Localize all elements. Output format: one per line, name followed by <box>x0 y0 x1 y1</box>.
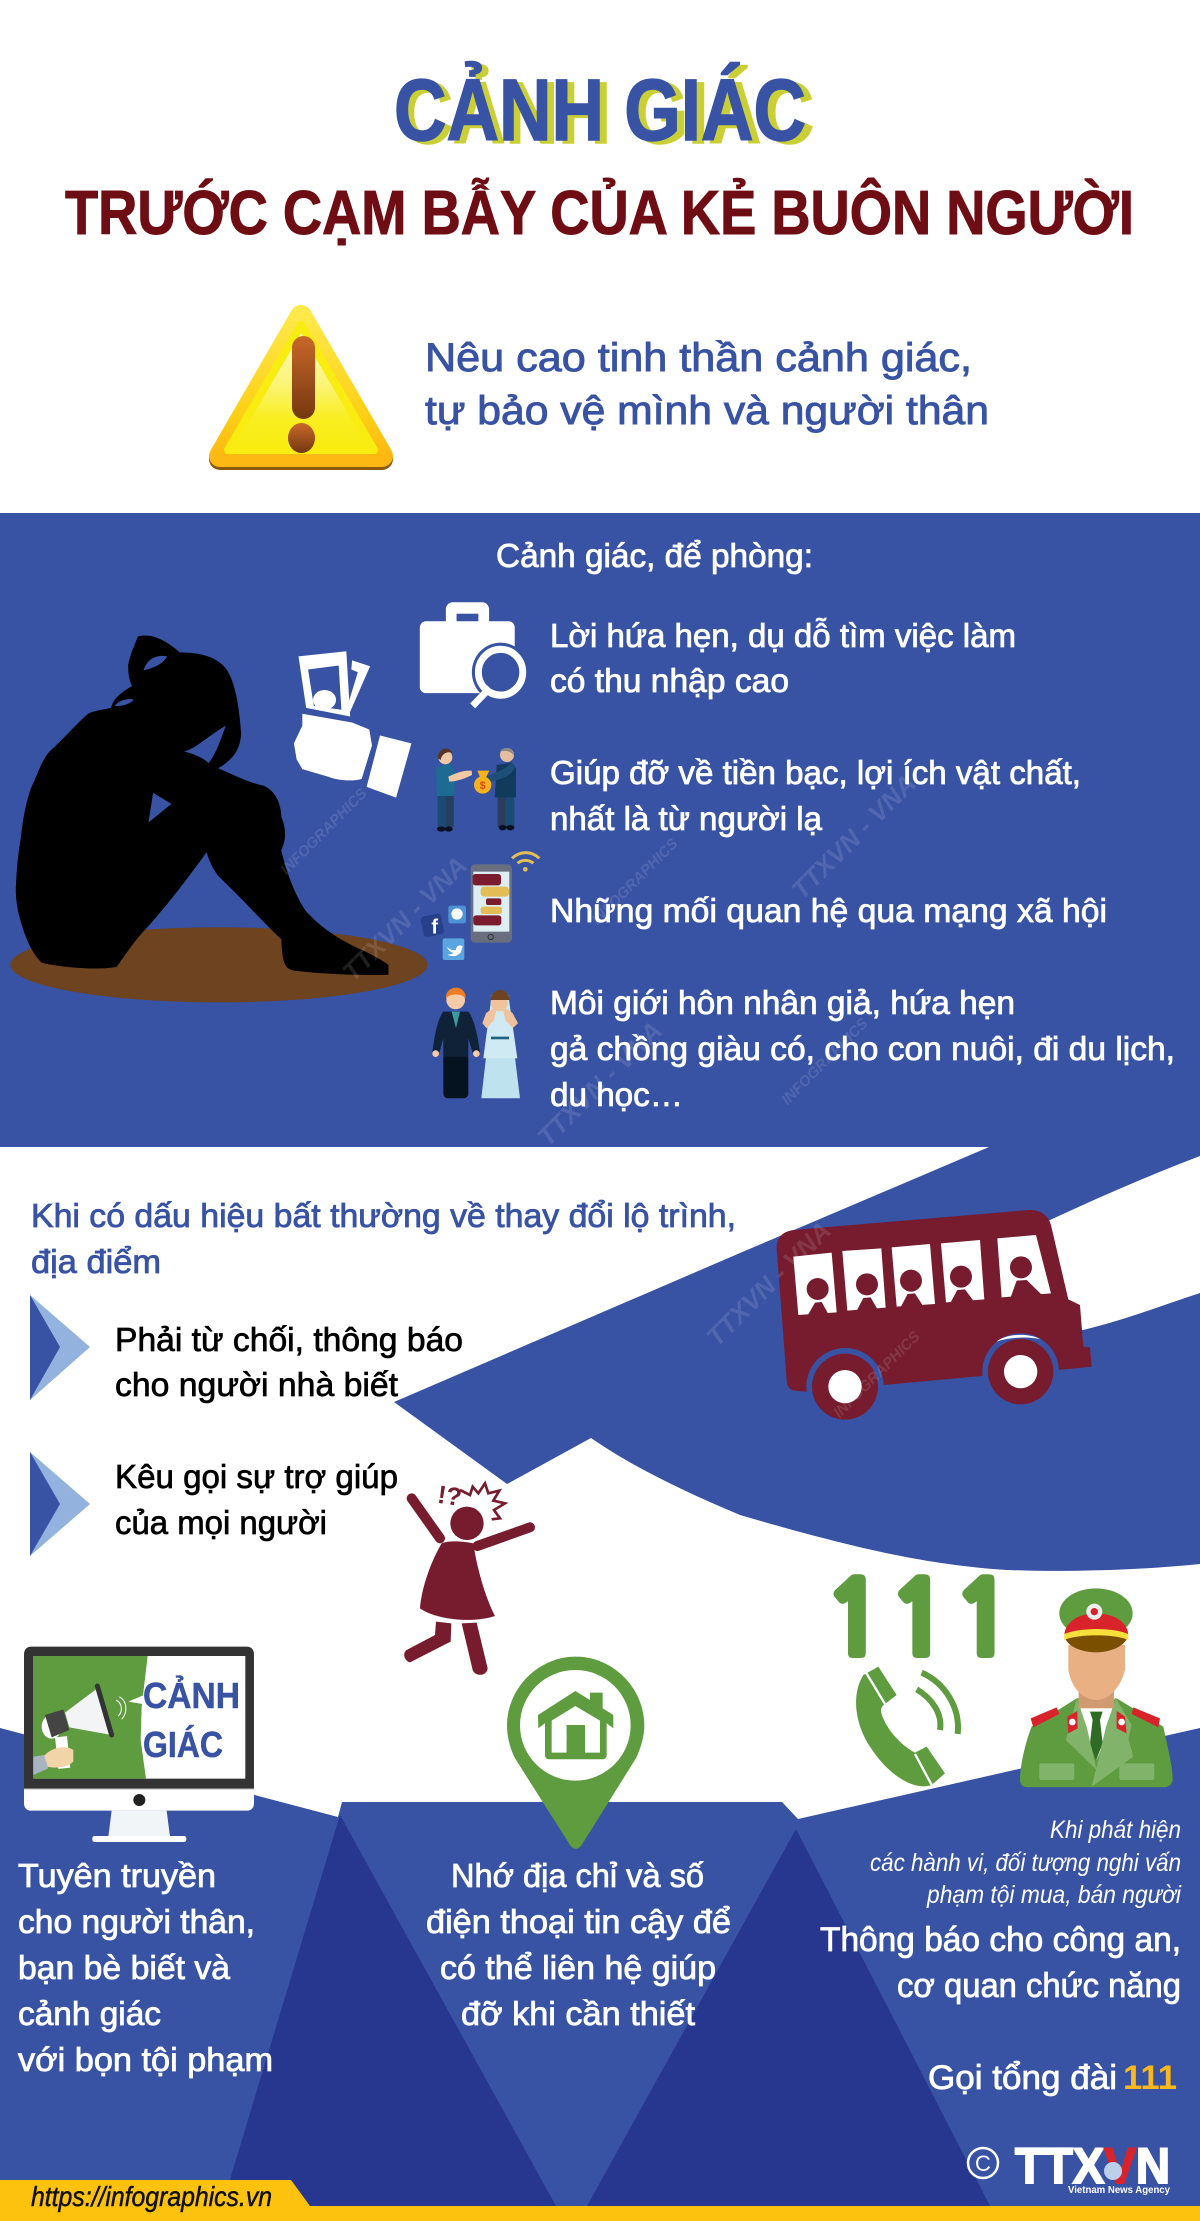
text: refuse and notify: Phải từ chối, thông báo <box>115 1321 463 1358</box>
text: job promises: Lời hứa hẹn, dụ dỗ tìm việc làm <box>550 617 1016 654</box>
text: center column advice: Nhớ địa chỉ và số <box>451 1857 704 1894</box>
title: Cảnh giác: CẢNH GIÁC <box>394 62 806 159</box>
watermarks: TTXVN - VNA <box>700 1215 837 1352</box>
white wedge in swoosh <box>1000 1156 1200 1340</box>
icon: two men exchanging money <box>436 748 516 832</box>
text: left column advice: Tuyên truyền <box>18 1857 216 1894</box>
icon: warning triangle <box>220 316 382 459</box>
watermarks: TTXVN - VNA <box>336 850 473 987</box>
text: fake marriage <box>550 984 1175 1113</box>
text: notify police: cơ quan chức năng <box>897 1967 1181 2005</box>
text: refuse and notify <box>115 1321 463 1403</box>
heading: unusual route signs: Khi có dấu hiệu bất thường về thay đổi lộ trình, <box>31 1197 736 1234</box>
arrow: second bullet <box>30 1452 90 1556</box>
text: call 111: Gọi tổng đài <box>928 2059 1117 2097</box>
subtitle text <box>425 336 989 433</box>
subtitle text: tự bảo vệ mình và người thân <box>425 389 989 433</box>
icon: woman in distress <box>404 1481 530 1675</box>
panel: blue warning background <box>0 513 1200 1147</box>
icon: briefcase with magnifier <box>420 602 529 706</box>
icon: police officer <box>1020 1588 1173 1787</box>
text: right column italic note: Khi phát hiện <box>1050 1816 1181 1844</box>
icon: groom and crying bride <box>432 988 520 1098</box>
text: right column italic note <box>870 1816 1182 1909</box>
logo: TTXVN: TTXVN <box>1015 2138 1170 2194</box>
watermarks: INFOGRAPHICS <box>778 1015 871 1108</box>
heading: unusual route signs: địa điểm <box>31 1243 161 1280</box>
icon: bus <box>777 1210 1092 1425</box>
text: left column advice: cảnh giác <box>18 1995 161 2032</box>
icon: smartphone with social networks <box>420 853 539 960</box>
text: center column advice: đỡ khi cần thiết <box>461 1995 695 2032</box>
arrow: first bullet <box>30 1295 90 1400</box>
icon: woman in distress: !? <box>436 1481 463 1512</box>
blue swoosh background <box>394 1147 1200 1571</box>
text: job promises: có thu nhập cao <box>550 662 789 699</box>
text: notify police <box>820 1921 1181 2005</box>
text: money help <box>550 754 1081 837</box>
text: center column advice: điện thoại tin cậy để <box>426 1903 731 1940</box>
text: call for help: Kêu gọi sự trợ giúp <box>115 1458 398 1495</box>
text: right column italic note: phạm tội mua, bán người <box>926 1881 1182 1909</box>
text: left column advice: cho người thân, <box>18 1903 255 1940</box>
number: 111: 111 <box>824 1570 1014 1670</box>
icon: smartphone with social networks: f <box>431 916 438 938</box>
icon: hand with money <box>294 651 411 798</box>
subtitle text: Nêu cao tinh thần cảnh giác, <box>425 336 972 380</box>
watermarks: INFOGRAPHICS <box>588 835 681 928</box>
heading: Cảnh giác, để phòng: Cảnh giác, để phòng: <box>496 537 813 574</box>
text: left column advice: với bọn tội phạm <box>18 2041 273 2078</box>
text: social networks: Những mối quan hệ qua mạng xã hội <box>550 892 1107 929</box>
text: monitor caption Cảnh giác: GIÁC <box>143 1724 223 1765</box>
text: money help: nhất là từ người lạ <box>550 800 823 837</box>
text: center column advice: có thể liên hệ giúp <box>440 1949 716 1986</box>
watermarks <box>277 768 923 1421</box>
text: fake marriage: Môi giới hôn nhân giả, hứa hẹn <box>550 984 1015 1021</box>
logo: TTXVN: Vietnam News Agency <box>1068 2185 1170 2196</box>
text: money help: Giúp đỡ về tiền bạc, lợi ích vật chất, <box>550 754 1081 791</box>
text: monitor caption Cảnh giác: CẢNH <box>143 1675 240 1716</box>
text: refuse and notify: cho người nhà biết <box>115 1366 398 1403</box>
text: notify police: Thông báo cho công an, <box>820 1921 1181 1959</box>
logo: TTXVN: C <box>975 2151 991 2176</box>
text: monitor caption Cảnh giác <box>143 1675 240 1765</box>
panel: bottom blue background <box>0 1728 1200 2206</box>
title: Cảnh giác: CẢNH GIÁC <box>400 65 814 162</box>
watermarks: TTXVN - VNA <box>785 768 922 905</box>
text: call for help <box>115 1458 398 1541</box>
text: job promises <box>550 617 1016 699</box>
illustration: sitting woman silhouette <box>10 635 427 1002</box>
text: left column advice: bạn bè biết và <box>18 1949 231 1986</box>
text: fake marriage: gả chồng giàu có, cho con nuôi, đi du lịch, <box>550 1030 1175 1067</box>
heading: unusual route signs <box>31 1197 736 1280</box>
footer yellow bar with url <box>0 2180 1200 2221</box>
text: center column advice <box>426 1857 731 2032</box>
text: left column advice <box>18 1857 273 2078</box>
icon: telephone handset <box>856 1667 958 1786</box>
footer yellow bar with url: https://infographics.vn <box>31 2181 272 2212</box>
text: call 111: 111 <box>1123 2059 1177 2097</box>
icon: two men exchanging money: $ <box>480 780 486 792</box>
watermarks: INFOGRAPHICS <box>277 785 370 878</box>
icon: location pin with house <box>507 1657 644 1849</box>
watermarks: TTXVN - VNA <box>531 1015 668 1152</box>
text: call for help: của mọi người <box>115 1504 327 1541</box>
icon: monitor with megaphone <box>24 1647 254 1842</box>
text: fake marriage: du học… <box>550 1076 683 1113</box>
watermarks: INFOGRAPHICS <box>830 1328 923 1421</box>
